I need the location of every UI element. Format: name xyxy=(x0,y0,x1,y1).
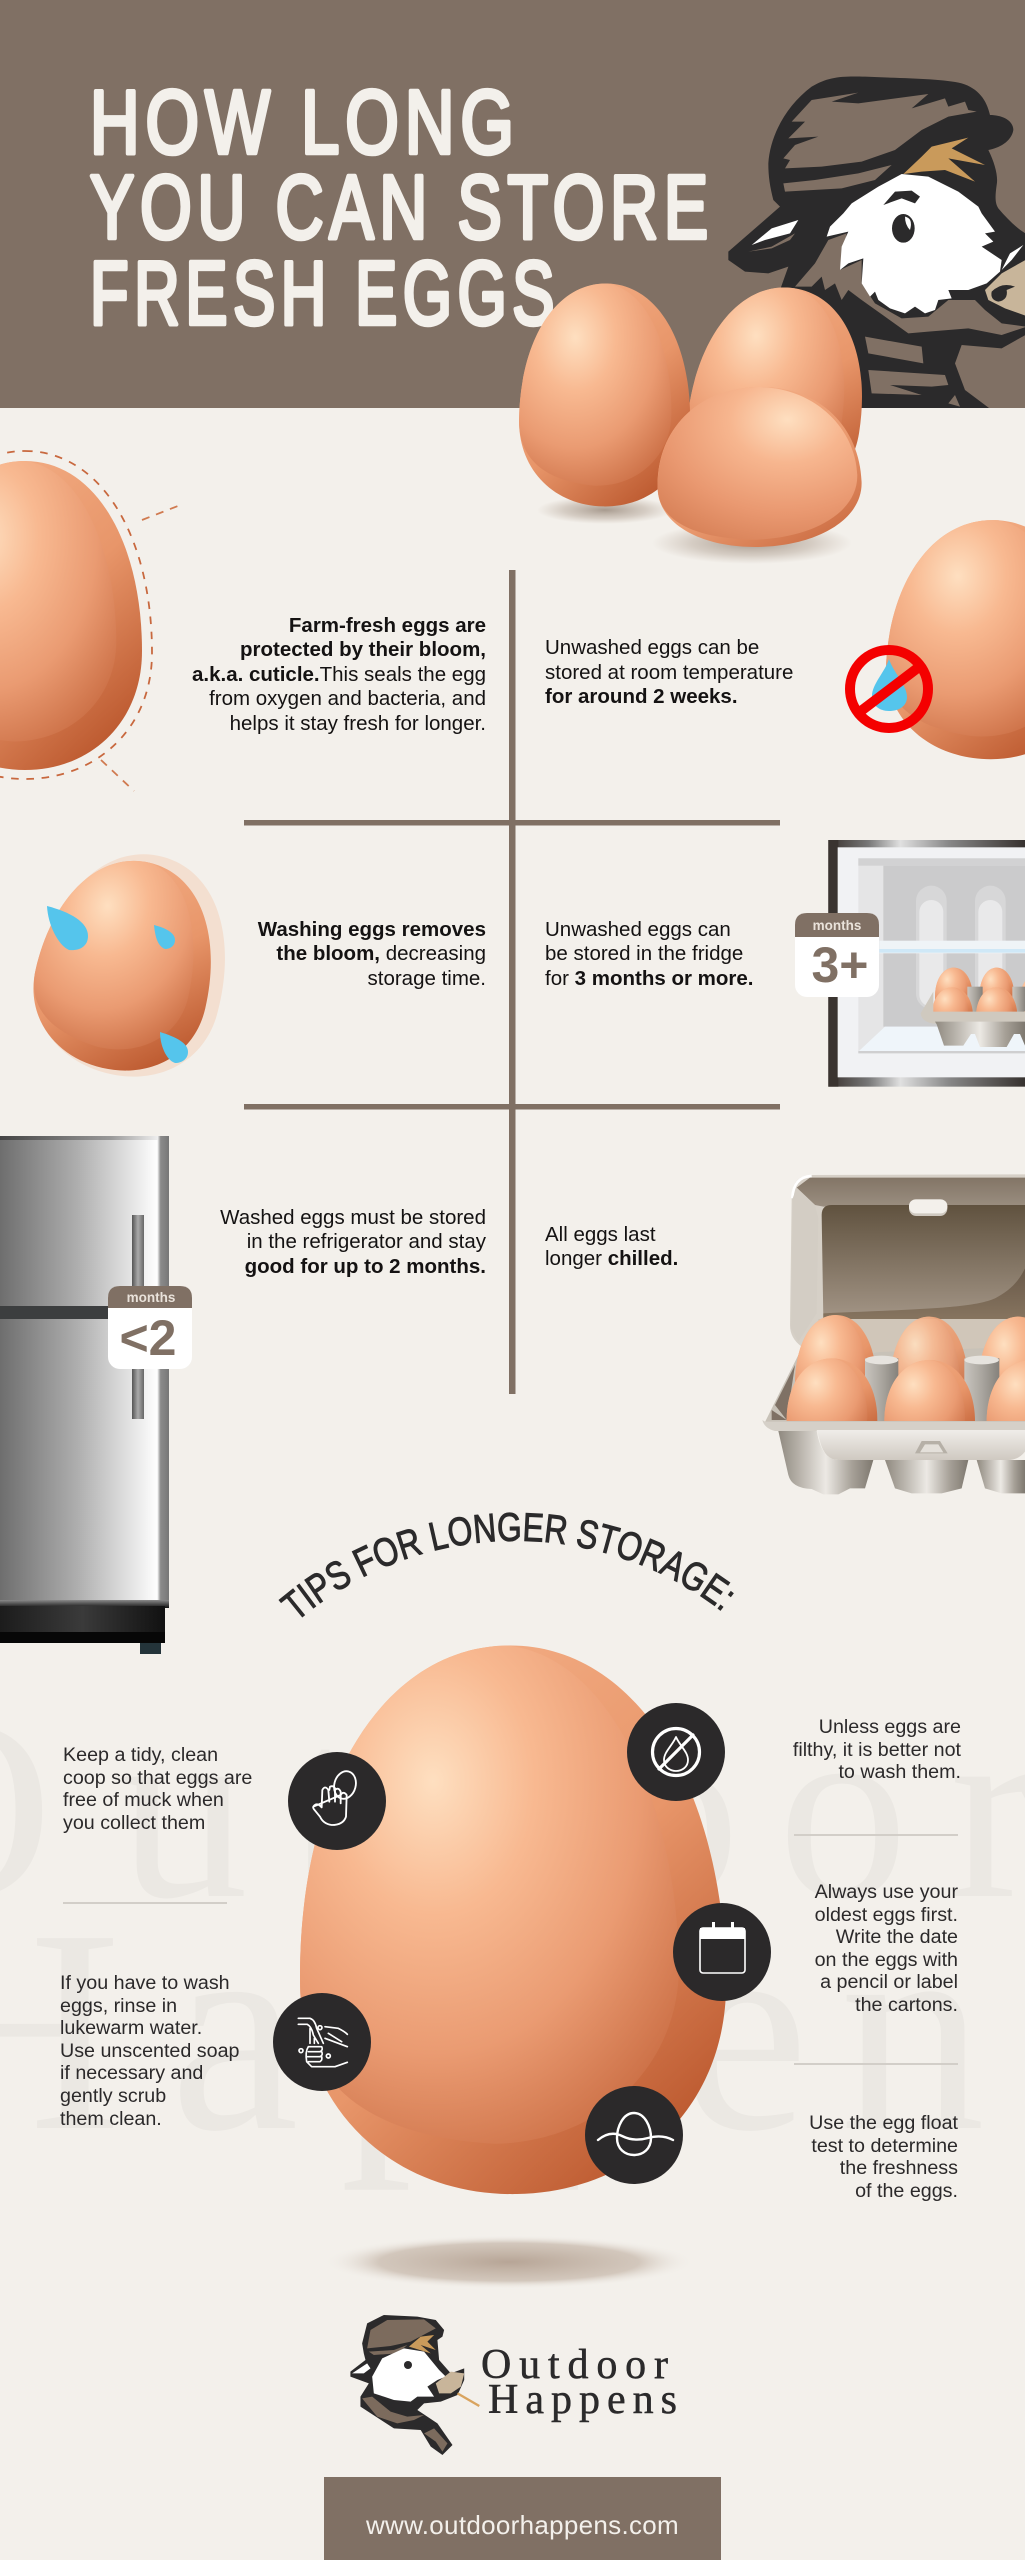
text: all eggs chilled: longer chilled. xyxy=(545,1247,678,1270)
tip: oldest eggs first: on the eggs with xyxy=(815,1949,958,1971)
tip: float test xyxy=(809,2112,958,2202)
text: farm-fresh eggs: a.k.a. cuticle.This seals the egg xyxy=(192,663,486,686)
three eggs group xyxy=(518,275,880,564)
icon: egg float test xyxy=(585,2086,683,2184)
text: all eggs chilled xyxy=(545,1223,678,1270)
logo wordmark: Happens xyxy=(488,2377,677,2423)
text: farm-fresh eggs xyxy=(192,614,486,735)
egg shadow left xyxy=(537,496,673,524)
ground shadow xyxy=(323,2235,695,2289)
mascot: goat with cap xyxy=(728,76,1025,410)
tip: rinse in lukewarm water xyxy=(60,1972,240,2130)
icon: hand with egg xyxy=(288,1752,386,1850)
tip: tidy coop: you collect them xyxy=(63,1812,205,1834)
icon: no washing xyxy=(627,1703,725,1801)
tip: oldest eggs first: the cartons. xyxy=(855,1994,958,2016)
carton eggs xyxy=(786,1315,1025,1421)
title xyxy=(90,73,714,344)
text: unwashed in fridge: for 3 months or more. xyxy=(545,967,753,990)
icon: washing hands xyxy=(273,1993,371,2091)
badge: under 2 months: months xyxy=(127,1290,175,1305)
text: washing removes bloom: Washing eggs removes xyxy=(258,918,486,941)
badge: 3+ months: months xyxy=(813,918,861,933)
heading: tips for longer storage: TIPS FOR LONGER STORAGE: xyxy=(278,1512,734,1618)
header band xyxy=(0,0,1025,408)
tip: oldest eggs first: a pencil or label xyxy=(820,1971,958,1993)
tip: oldest eggs first: Write the date xyxy=(836,1926,958,1948)
tip: rinse in lukewarm water: them clean. xyxy=(60,2108,162,2130)
logo wordmark: Outdoor xyxy=(481,2342,668,2388)
big central egg xyxy=(294,1642,730,2198)
text: washing removes bloom: the bloom, decreasing xyxy=(276,942,486,965)
closed refrigerator xyxy=(0,1136,169,1654)
egg back left xyxy=(518,282,692,508)
text: unwashed room temperature xyxy=(545,636,793,708)
logo mascot xyxy=(350,2315,479,2455)
icon: prohibition sign xyxy=(850,650,928,728)
tip: do not wash: Unless eggs are xyxy=(819,1716,961,1738)
badge: 3+ months: 3+ xyxy=(811,937,869,993)
text: washed eggs refrigerator xyxy=(220,1206,486,1278)
badge: under 2 months xyxy=(108,1286,192,1369)
text: farm-fresh eggs: helps it stay fresh for longer. xyxy=(230,712,486,735)
badge: 3+ months xyxy=(795,913,879,997)
tip: rinse in lukewarm water: gently scrub xyxy=(60,2085,166,2107)
footer url bar: www.outdoorhappens.com xyxy=(366,2510,679,2540)
text: farm-fresh eggs: from oxygen and bacteria, and xyxy=(209,687,486,710)
text: unwashed in fridge: be stored in the fridge xyxy=(545,942,743,965)
logo wordmark xyxy=(481,2342,677,2423)
egg carton xyxy=(762,1174,1025,1494)
text: unwashed room temperature: stored at room temperature xyxy=(545,661,793,684)
text: washing removes bloom xyxy=(258,918,486,990)
text: washed eggs refrigerator: in the refrigerator and stay xyxy=(247,1230,486,1253)
tip: oldest eggs first: Always use your xyxy=(815,1881,958,1903)
egg shadow front xyxy=(652,522,852,564)
tip: tidy coop: Keep a tidy, clean xyxy=(63,1744,218,1766)
tip: float test: test to determine xyxy=(811,2135,958,2157)
tip: rinse in lukewarm water: eggs, rinse in xyxy=(60,1995,177,2017)
egg back right xyxy=(676,275,880,515)
tip: do not wash: to wash them. xyxy=(838,1761,961,1783)
text: washing removes bloom: storage time. xyxy=(368,967,486,990)
tip dividers xyxy=(63,1834,958,2065)
tip: do not wash: filthy, it is better not xyxy=(793,1739,961,1761)
tip: tidy coop: free of muck when xyxy=(63,1789,224,1811)
tip: oldest eggs first xyxy=(814,1881,958,2016)
title: HOW LONG xyxy=(90,73,520,173)
washed egg with water drops xyxy=(15,833,253,1097)
tip: oldest eggs first: oldest eggs first. xyxy=(815,1904,958,1926)
text: washed eggs refrigerator: Washed eggs must be stored xyxy=(220,1206,486,1229)
title: YOU CAN STORE xyxy=(90,158,714,258)
title: FRESH EGGS xyxy=(90,244,560,344)
text: all eggs chilled: All eggs last xyxy=(545,1223,656,1246)
egg with bloom and dashed outline xyxy=(0,451,183,791)
text: unwashed room temperature: for around 2 weeks. xyxy=(545,685,738,708)
badge: under 2 months: <2 xyxy=(119,1310,177,1366)
text: unwashed in fridge xyxy=(545,918,753,990)
grid divider lines xyxy=(244,570,780,1394)
tip: rinse in lukewarm water: If you have to wash xyxy=(60,1972,230,1994)
text: farm-fresh eggs: protected by their bloom, xyxy=(240,638,486,661)
tip: rinse in lukewarm water: lukewarm water. xyxy=(60,2017,202,2039)
footer url bar xyxy=(324,2477,721,2560)
tip: rinse in lukewarm water: Use unscented soap xyxy=(60,2040,240,2062)
tip: tidy coop: coop so that eggs are xyxy=(63,1767,252,1789)
icon: water drops xyxy=(47,906,188,1063)
tip: tidy coop xyxy=(63,1744,252,1834)
watermark: Outdoor Happens xyxy=(0,1665,1025,2191)
text: farm-fresh eggs: Farm-fresh eggs are xyxy=(289,614,486,637)
icon: calendar xyxy=(673,1903,771,2001)
text: washed eggs refrigerator: good for up to 2 months. xyxy=(245,1255,486,1278)
tip: float test: of the eggs. xyxy=(855,2180,958,2202)
tip: float test: the freshness xyxy=(840,2157,958,2179)
egg with no-water sign xyxy=(850,513,1025,766)
tip: rinse in lukewarm water: if necessary and xyxy=(60,2062,203,2084)
text: unwashed room temperature: Unwashed eggs can be xyxy=(545,636,759,659)
eggs tray xyxy=(933,968,1025,1012)
tip: float test: Use the egg float xyxy=(809,2112,958,2134)
tip: do not wash xyxy=(793,1716,961,1783)
open fridge with eggs xyxy=(828,840,1025,1087)
egg front xyxy=(654,383,864,550)
icon: water drop xyxy=(872,659,907,711)
text: unwashed in fridge: Unwashed eggs can xyxy=(545,918,731,941)
